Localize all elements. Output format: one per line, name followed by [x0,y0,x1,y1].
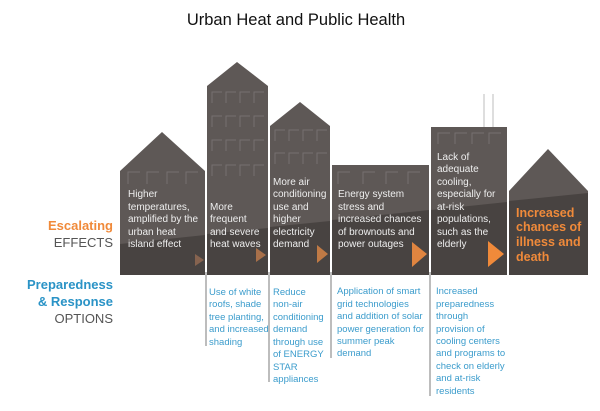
response texts: residents [436,386,475,397]
response texts: demand [273,324,307,335]
effect texts: such as the [437,227,489,238]
response texts: non-air [273,299,303,310]
effect texts: electricity [273,227,315,238]
final effect: death [516,250,549,264]
effect texts: populations, [437,214,491,225]
effect texts [128,152,496,250]
response texts: and programs to [436,348,505,359]
effect texts: More air [273,177,310,188]
effect texts: demand [273,239,309,250]
arrows [195,241,504,267]
effect texts: Higher [128,189,158,200]
effect texts: amplified by the [128,214,198,225]
left labels: OPTIONS [54,311,113,326]
effect texts: at-risk [437,202,465,213]
effect texts: power outages [338,239,404,250]
response texts: roofs, shade [209,299,261,310]
response texts: Application of smart [337,286,421,297]
left labels: Preparedness [27,277,113,292]
shadow band [120,193,588,275]
effect texts: conditioning [273,189,326,200]
left labels: Escalating [48,218,113,233]
response texts: provision of [436,324,485,335]
effect texts: cooling, [437,177,471,188]
separator lines [206,94,493,396]
left labels: & Response [38,294,113,309]
final effect: illness and [516,235,581,249]
response texts: conditioning [273,312,324,323]
response texts: tree planting, [209,312,264,323]
final effect [516,206,582,264]
effect texts: island effect [128,239,181,250]
response texts: check on elderly [436,361,505,372]
effect texts: increased chances [338,214,421,225]
response texts: Reduce [273,287,306,298]
windows [128,92,501,184]
response texts: shading [209,337,242,348]
response texts: STAR [273,362,298,373]
response texts: appliances [273,374,319,385]
response texts: through [436,311,468,322]
left labels: EFFECTS [54,235,113,250]
effect texts: and severe [210,227,260,238]
effect texts: of brownouts and [338,227,415,238]
response texts: and addition of solar [337,311,423,322]
effect texts: Energy system [338,189,404,200]
response texts: preparedness [436,299,494,310]
final effect: Increased [516,206,574,220]
response texts: Increased [436,286,478,297]
response texts: Use of white [209,287,261,298]
response texts: demand [337,348,371,359]
effect texts: especially for [437,189,496,200]
effect texts: heat waves [210,239,261,250]
effect texts: Lack of [437,152,469,163]
response texts: of ENERGY [273,349,324,360]
effect texts: higher [273,214,301,225]
response texts: power generation for [337,324,424,335]
response texts: and at-risk [436,373,481,384]
response texts: cooling centers [436,336,500,347]
response texts [209,286,505,397]
effect texts: urban heat [128,227,176,238]
effect texts: temperatures, [128,202,190,213]
response texts: grid technologies [337,299,409,310]
final effect: chances of [516,220,582,234]
effect texts: adequate [437,164,479,175]
effect texts: frequent [210,214,247,225]
response texts: through use [273,337,323,348]
effect texts: More [210,202,233,213]
response texts: and increased [209,324,269,335]
buildings [120,62,588,275]
title: Urban Heat and Public Health [187,11,405,29]
left labels [27,218,113,326]
effect texts: stress and [338,202,384,213]
effect texts: use and [273,202,309,213]
effect texts: elderly [437,239,466,250]
response texts: summer peak [337,336,395,347]
